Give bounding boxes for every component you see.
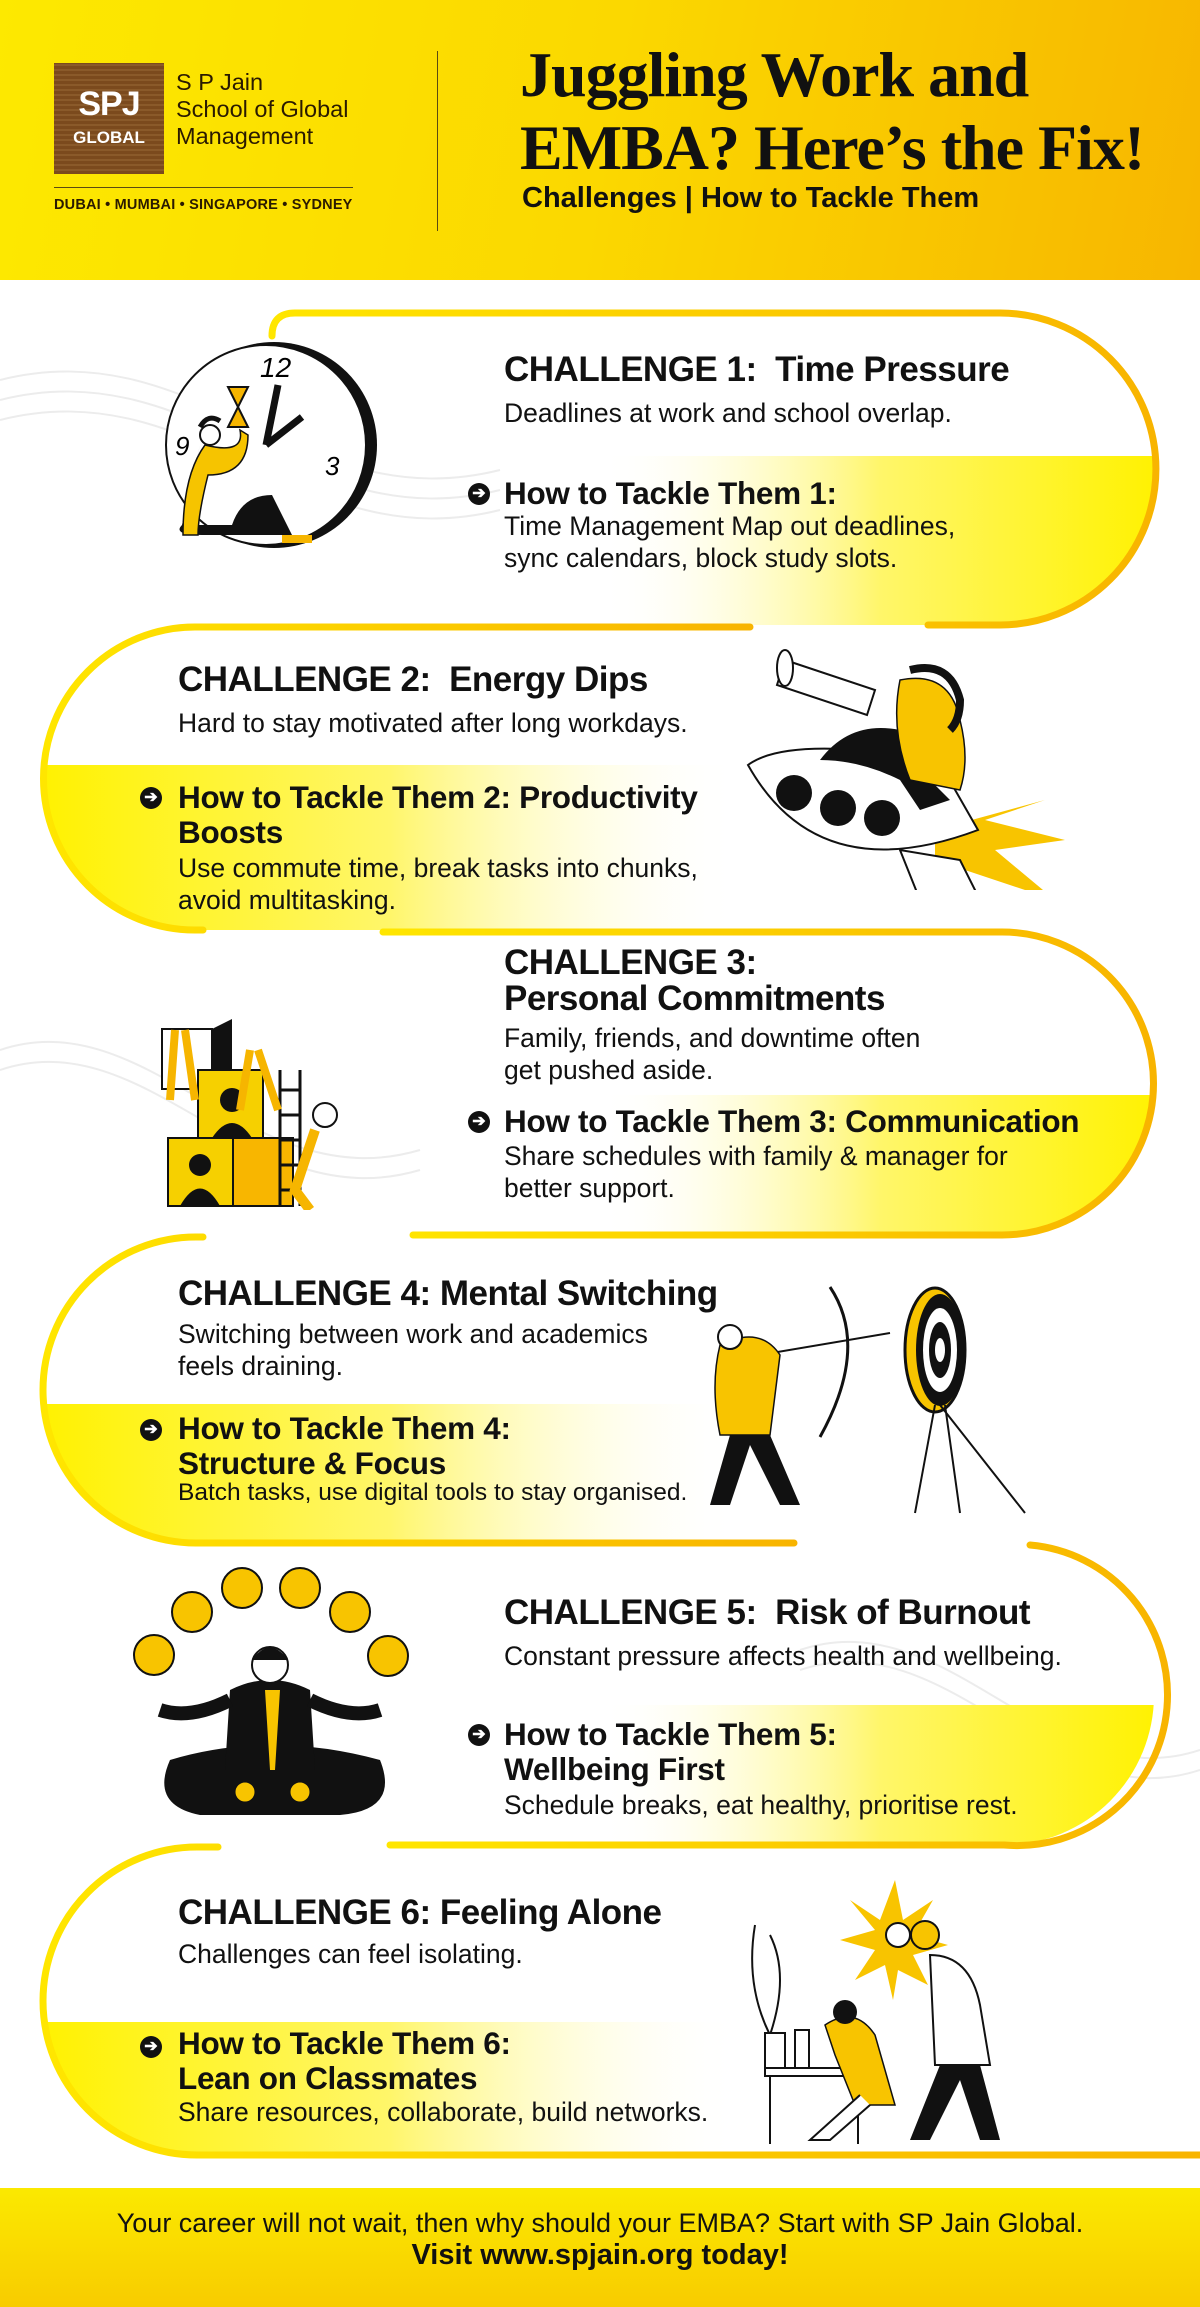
section 3 text: better support. <box>504 1173 675 1203</box>
section 4 text: How to Tackle Them 4: <box>178 1410 511 1446</box>
footer band: Visit www.spjain.org today! <box>411 2239 789 2271</box>
section 6 text <box>140 1893 708 2127</box>
arrow icon <box>140 1419 162 1441</box>
section 1 text: sync calendars, block study slots. <box>504 543 897 573</box>
logo box <box>54 63 164 174</box>
section 2 text <box>140 660 698 915</box>
illustration: clock: 9 <box>175 431 189 461</box>
section 4 text <box>140 1274 718 1506</box>
section 5 text: How to Tackle Them 5: <box>504 1716 837 1752</box>
footer band <box>0 2188 1200 2307</box>
arrow icon: ➔ <box>472 1113 486 1130</box>
arrow icon: ➔ <box>144 1421 158 1438</box>
heading 4: CHALLENGE 4: Mental Switching <box>178 1274 718 1313</box>
section 3 text: Share schedules with family & manager for <box>504 1141 1008 1171</box>
heading 3 <box>504 943 885 1018</box>
section 5 text: Constant pressure affects health and wellbeing. <box>504 1641 1062 1671</box>
logo box: SPJ <box>78 85 140 123</box>
section 2 text: Boosts <box>178 814 283 850</box>
cities: DUBAI • MUMBAI • SINGAPORE • SYDNEY <box>54 197 353 213</box>
section 1 text: Deadlines at work and school overlap. <box>504 398 952 428</box>
section 4 text: Switching between work and academics <box>178 1319 648 1349</box>
section 2 text: Hard to stay motivated after long workdays. <box>178 708 688 738</box>
heading 3: Personal Commitments <box>504 979 885 1018</box>
illustration: meditation juggling <box>133 1567 409 1815</box>
section 2 text: avoid multitasking. <box>178 885 396 915</box>
section 6 text: Share resources, collaborate, build networks. <box>178 2097 708 2127</box>
section 4 text: feels draining. <box>178 1351 343 1381</box>
section 2 text: How to Tackle Them 2: Productivity <box>178 779 698 815</box>
arrow icon <box>468 1724 490 1746</box>
section 1 text <box>468 350 1009 573</box>
heading 5: CHALLENGE 5: Risk of Burnout <box>504 1593 1030 1632</box>
title: EMBA? Here’s the Fix! <box>520 112 1144 183</box>
section 6 text: Lean on Classmates <box>178 2060 477 2096</box>
illustration: clock: 12 <box>260 352 292 383</box>
header band <box>0 0 1200 280</box>
section 3 text: get pushed aside. <box>504 1055 713 1085</box>
section 3 text: Family, friends, and downtime often <box>504 1023 920 1053</box>
title <box>520 39 1144 183</box>
logo text <box>176 69 348 149</box>
footer text: Your career will not wait, then why should your EMBA? Start with SP Jain Global. <box>117 2208 1083 2238</box>
section 4 text: Structure & Focus <box>178 1445 446 1481</box>
heading 6: CHALLENGE 6: Feeling Alone <box>178 1893 662 1932</box>
heading 2: CHALLENGE 2: Energy Dips <box>178 660 648 699</box>
section 1 text: Time Management Map out deadlines, <box>504 511 955 541</box>
section 6 text: Challenges can feel isolating. <box>178 1939 523 1969</box>
illustration: family blocks <box>161 1019 338 1210</box>
illustration: clock <box>165 342 377 548</box>
section 4 text: Batch tasks, use digital tools to stay organised. <box>178 1479 687 1506</box>
logo text: School of Global <box>176 96 348 122</box>
logo text: Management <box>176 123 313 149</box>
section 6 text: How to Tackle Them 6: <box>178 2025 511 2061</box>
title: Juggling Work and <box>520 39 1028 110</box>
illustration: clock: 3 <box>325 451 340 481</box>
arrow icon <box>468 1111 490 1133</box>
illustration: desk collaboration <box>751 1880 1000 2144</box>
arrow icon <box>140 787 162 809</box>
arrow icon <box>468 483 490 505</box>
illustration: rocket <box>746 649 1065 890</box>
arrow icon: ➔ <box>144 2038 158 2055</box>
arrow icon: ➔ <box>472 1726 486 1743</box>
section 5 text: Schedule breaks, eat healthy, prioritise rest. <box>504 1790 1018 1820</box>
section 3 text <box>468 943 1079 1203</box>
section 3 text: How to Tackle Them 3: Communication <box>504 1103 1079 1139</box>
heading 1: CHALLENGE 1: Time Pressure <box>504 350 1009 389</box>
subtitle: Challenges | How to Tackle Them <box>522 182 979 214</box>
illustration: archer and target <box>710 1286 1026 1514</box>
section 2 text: Use commute time, break tasks into chunks, <box>178 853 698 883</box>
logo box: GLOBAL <box>73 128 145 147</box>
section 1 text: How to Tackle Them 1: <box>504 475 837 511</box>
logo text: S P Jain <box>176 69 263 95</box>
section 5 text <box>468 1593 1062 1820</box>
logo <box>54 63 353 213</box>
section 5 text: Wellbeing First <box>504 1751 725 1787</box>
arrow icon: ➔ <box>144 789 158 806</box>
arrow icon: ➔ <box>472 485 486 502</box>
heading 3: CHALLENGE 3: <box>504 943 757 982</box>
arrow icon <box>140 2036 162 2058</box>
